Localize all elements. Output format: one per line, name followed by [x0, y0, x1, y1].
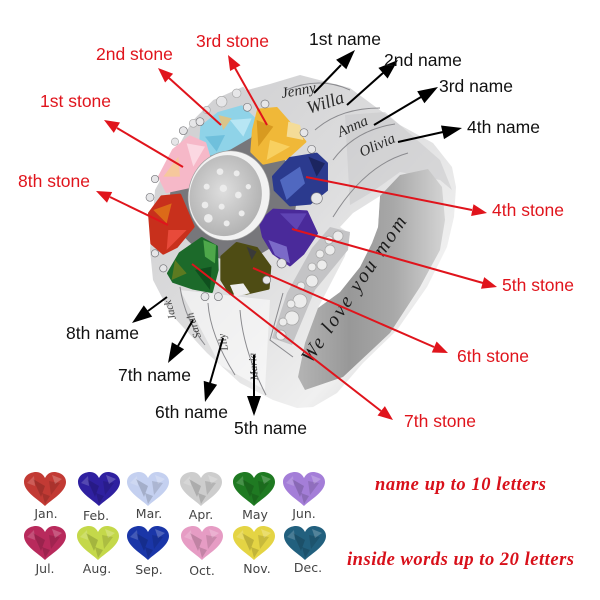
- red arrow: 8th stone: [96, 191, 168, 225]
- black arrow: 7th name: [168, 320, 193, 363]
- note: name limit: name up to 10 letters: [375, 475, 546, 495]
- center oval of diamonds: [180, 143, 278, 248]
- name: Olivia: Olivia: [357, 131, 398, 161]
- black arrow: 6th name: [204, 338, 223, 402]
- heart: January: [24, 472, 66, 506]
- month: Aug.: Aug.: [83, 561, 111, 576]
- stone: purple heart: [260, 210, 317, 265]
- black arrow: 3rd name: [374, 87, 438, 125]
- lower highlight: [180, 290, 270, 390]
- label: 2nd name: 2nd name: [384, 50, 462, 70]
- heart: October: [181, 526, 223, 560]
- stone: dark blue heart: [273, 154, 327, 205]
- label: 7th stone: 7th stone: [404, 411, 476, 431]
- label: 7th name: 7th name: [118, 365, 191, 385]
- name: Lily: Lily: [216, 333, 231, 353]
- month: Oct.: Oct.: [189, 563, 215, 578]
- red arrow: 3rd stone: [228, 55, 267, 125]
- red arrow: 2nd stone: [158, 68, 221, 125]
- inside of the ring band: [298, 169, 445, 390]
- note: inside words limit: inside words up to 20 letters: [347, 550, 574, 570]
- stone: pink heart: [159, 137, 210, 192]
- heart: March: [127, 472, 169, 506]
- label: 6th name: 6th name: [155, 402, 228, 422]
- birthstone chart: [24, 472, 326, 578]
- month: Feb.: Feb.: [83, 508, 109, 523]
- label: 4th stone: 4th stone: [492, 200, 564, 220]
- month: Mar.: Mar.: [136, 506, 162, 521]
- black arrow: 5th name: [247, 355, 261, 416]
- name: Sarah: Sarah: [184, 311, 204, 340]
- name: Jenny: Jenny: [280, 80, 317, 102]
- black arrow: 1st name: [314, 50, 355, 93]
- heart: April: [180, 472, 222, 506]
- band grooves: [180, 83, 408, 395]
- label: 3rd name: 3rd name: [439, 76, 513, 96]
- prongs: [146, 100, 322, 301]
- red arrow: 5th stone: [292, 229, 497, 289]
- label: 4th name: 4th name: [467, 117, 540, 137]
- dark setting behind stones: [170, 133, 297, 260]
- label: 6th stone: 6th stone: [457, 346, 529, 366]
- top-side small diamonds: [171, 87, 253, 145]
- name: Jack: Jack: [162, 298, 179, 321]
- name: Maria: Maria: [247, 352, 261, 382]
- label: 3rd stone: 3rd stone: [196, 31, 269, 51]
- red arrow: 1st stone: [104, 120, 183, 167]
- pave diamond strip: [272, 227, 350, 345]
- label: 8th stone: 8th stone: [18, 171, 90, 191]
- month: Jan.: Jan.: [33, 506, 58, 521]
- engraved names on top: [280, 80, 398, 161]
- stone: green heart: [168, 238, 217, 292]
- red arrow: 4th stone: [306, 177, 487, 216]
- top band shading: [345, 112, 452, 205]
- heart: July: [24, 526, 66, 560]
- month: Jun.: Jun.: [291, 506, 316, 521]
- heart: September: [127, 526, 169, 560]
- inner engraving: We love you mom: We love you mom: [297, 212, 411, 367]
- ring body: [150, 75, 456, 408]
- ring illustration: [146, 75, 456, 408]
- month: Dec.: Dec.: [294, 560, 322, 575]
- month: May: May: [242, 507, 269, 522]
- heart: June: [283, 472, 325, 506]
- heart: May: [233, 472, 275, 506]
- stone: light blue heart: [201, 107, 254, 155]
- black arrow: 2nd name: [347, 60, 398, 105]
- month: Nov.: Nov.: [243, 561, 271, 576]
- stones and centre setting: [146, 87, 327, 301]
- label: 8th name: 8th name: [66, 323, 139, 343]
- label: 1st stone: 1st stone: [40, 91, 111, 111]
- heart: August: [77, 526, 119, 560]
- heart: December: [284, 526, 326, 560]
- black arrow: 8th name: [132, 297, 167, 323]
- stone: red heart: [149, 195, 193, 253]
- label: 2nd stone: 2nd stone: [96, 44, 173, 64]
- name: Willa: Willa: [304, 87, 346, 118]
- month: Apr.: Apr.: [189, 507, 213, 522]
- label: 5th name: 5th name: [234, 418, 307, 438]
- month: Jul.: Jul.: [34, 561, 55, 576]
- black arrow: 4th name: [398, 126, 462, 142]
- name: Anna: Anna: [334, 113, 371, 141]
- engraved names on bottom: [162, 298, 261, 382]
- label: 5th stone: 5th stone: [502, 275, 574, 295]
- label: 1st name: 1st name: [309, 29, 381, 49]
- ring opening: [318, 196, 380, 308]
- stone: yellow heart: [252, 108, 305, 163]
- red arrow: 7th stone: [192, 264, 393, 420]
- red arrow: 6th stone: [253, 268, 448, 353]
- heart: February: [78, 472, 120, 506]
- heart: November: [233, 526, 275, 560]
- stone: olive heart: [222, 243, 270, 297]
- month: Sep.: Sep.: [135, 562, 163, 577]
